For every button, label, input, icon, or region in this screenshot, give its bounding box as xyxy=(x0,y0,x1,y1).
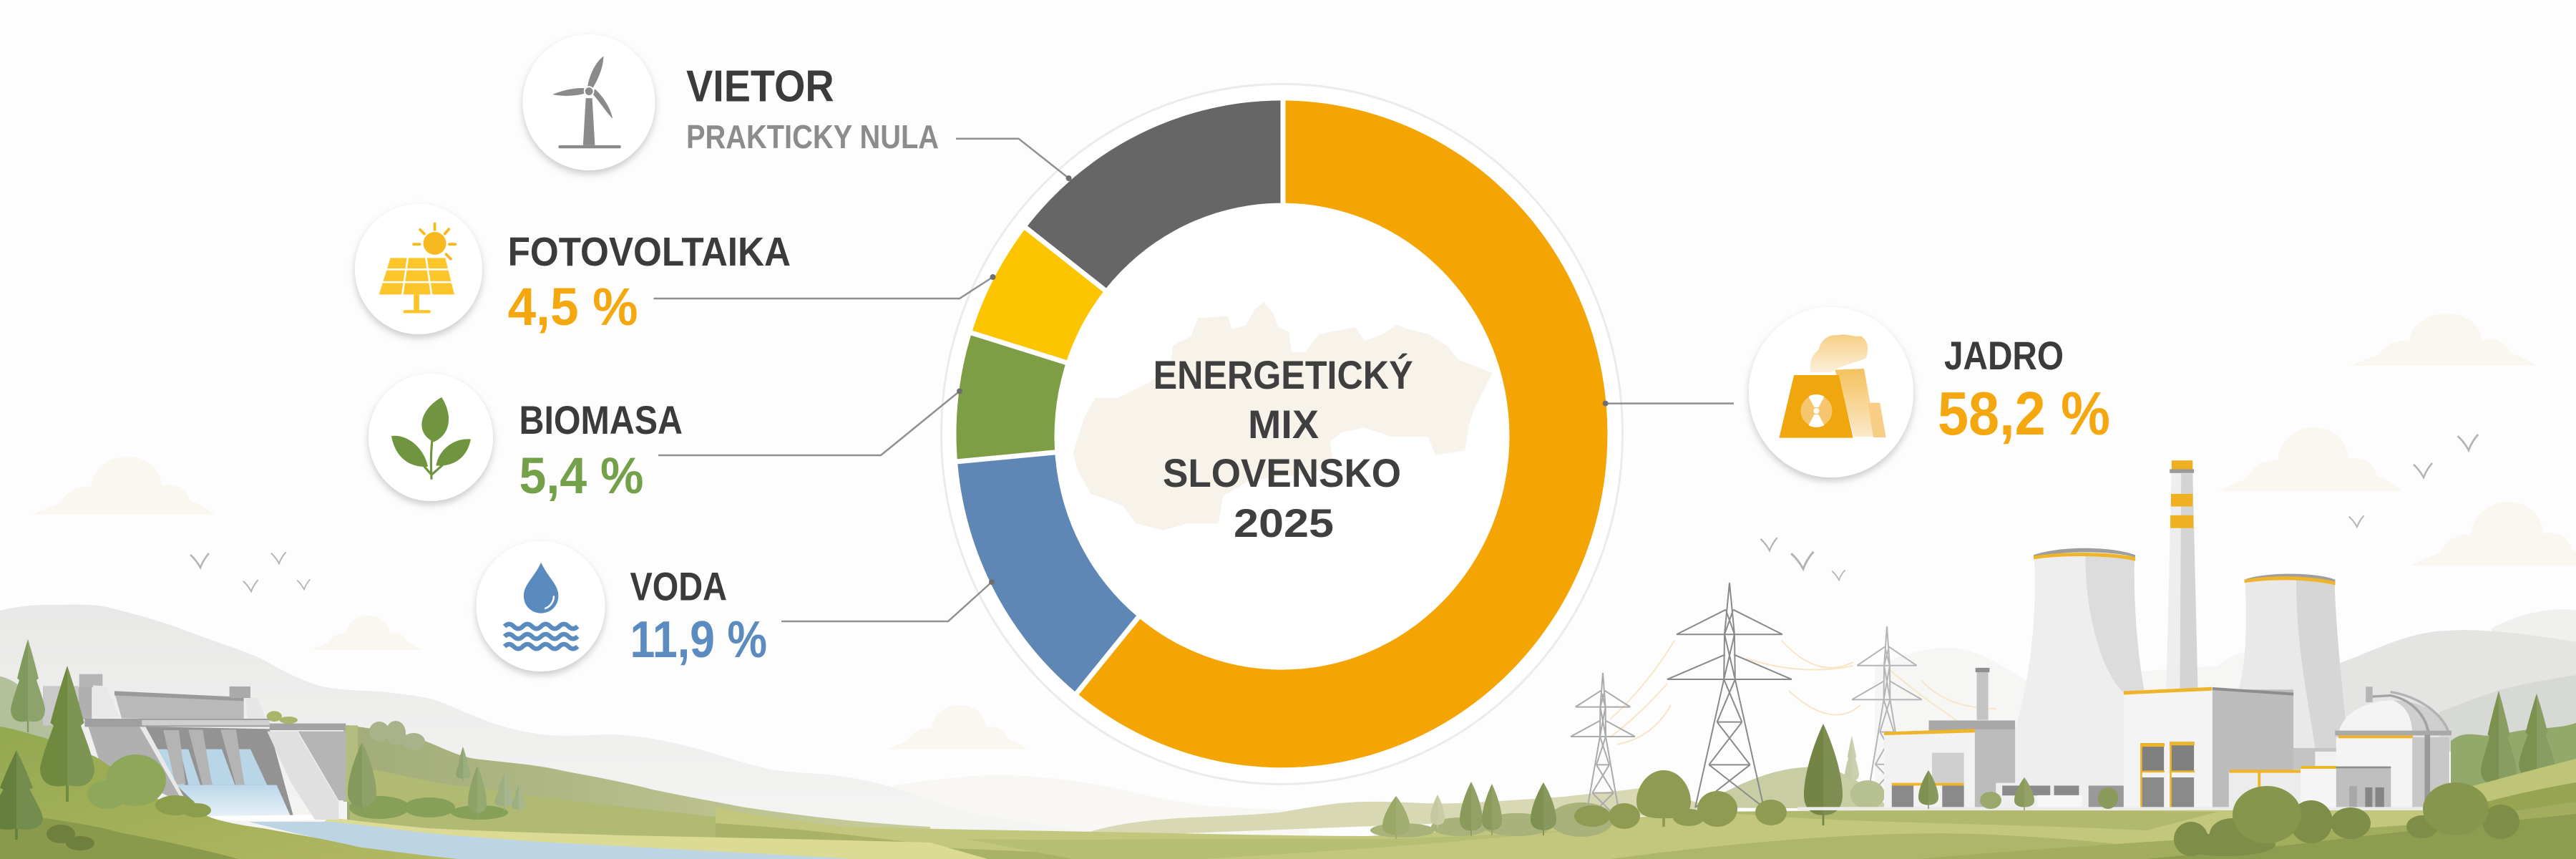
icon circle: vietor xyxy=(522,34,655,170)
value: fotovoltaika: 4,5 % xyxy=(508,277,638,336)
left trees and bushes xyxy=(0,639,526,859)
connector lines xyxy=(654,139,1734,621)
panel: voda xyxy=(477,541,767,671)
icon: leaves xyxy=(391,397,471,480)
label: biomasa: BIOMASA xyxy=(519,397,683,442)
icon circle: biomasa xyxy=(369,374,493,501)
right foreground hills and trees xyxy=(1919,691,2576,859)
center title xyxy=(1153,352,1413,545)
connector dots xyxy=(957,175,1609,585)
reactor dome and right buildings xyxy=(2212,686,2451,807)
panel: jadro xyxy=(1749,307,2110,477)
icon: water drop xyxy=(504,563,577,649)
icon: nuclear cooling towers xyxy=(1779,334,1886,438)
segment: jadro xyxy=(956,100,1607,767)
label: vietor: VIETOR xyxy=(686,62,834,112)
mid-ground trees xyxy=(1370,782,1614,839)
segment: vietor xyxy=(1028,100,1281,288)
center title: ENERGETICKÝ xyxy=(1153,352,1413,397)
green hills and ground xyxy=(0,676,2576,859)
power lines xyxy=(1610,641,1996,744)
panel: fotovoltaika xyxy=(355,204,791,336)
clouds xyxy=(33,314,2576,749)
label: fotovoltaika: FOTOVOLTAIKA xyxy=(508,229,791,275)
icon: wind turbine xyxy=(552,56,621,148)
segment gaps xyxy=(948,93,1283,700)
outer thin ring xyxy=(942,84,1623,784)
trees by pylons xyxy=(1574,724,1885,829)
birds xyxy=(190,435,2478,591)
cooling towers and stack xyxy=(1884,460,2348,807)
inner circle xyxy=(1055,203,1510,670)
foreground left hillside xyxy=(0,727,458,859)
icon: solar panel xyxy=(379,224,455,314)
icon circle: voda xyxy=(477,541,605,671)
value: voda: 11,9 % xyxy=(630,611,767,669)
donut segments xyxy=(930,72,1607,767)
hydroelectric dam xyxy=(43,674,358,821)
segment: fotovoltaika xyxy=(972,230,1103,360)
panel: biomasa xyxy=(369,374,683,505)
label: voda: VODA xyxy=(630,564,727,609)
center title: SLOVENSKO xyxy=(1163,450,1401,495)
slovakia map silhouette xyxy=(1073,302,1493,530)
distant hills xyxy=(0,605,2576,859)
main reactor building front xyxy=(1798,687,2424,810)
value: prakticky nula: PRAKTICKY NULA xyxy=(686,118,939,155)
value: biomasa: 5,4 % xyxy=(519,448,644,505)
value: jadro: 58,2 % xyxy=(1938,380,2110,448)
icon circle: jadro xyxy=(1749,307,1913,477)
center title: MIX xyxy=(1248,402,1319,447)
label: jadro: JADRO xyxy=(1944,333,2064,378)
donut chart xyxy=(930,72,1623,784)
icon circle: fotovoltaika xyxy=(355,204,482,334)
transmission pylons xyxy=(1571,583,1922,821)
river xyxy=(249,822,852,859)
panel: vietor xyxy=(522,34,939,170)
center title: 2025 xyxy=(1234,500,1334,545)
segment: biomasa xyxy=(956,335,1065,460)
small trees in front of plant xyxy=(1918,770,2118,810)
segment: voda xyxy=(957,455,1136,691)
nuclear power plant xyxy=(1798,460,2451,810)
